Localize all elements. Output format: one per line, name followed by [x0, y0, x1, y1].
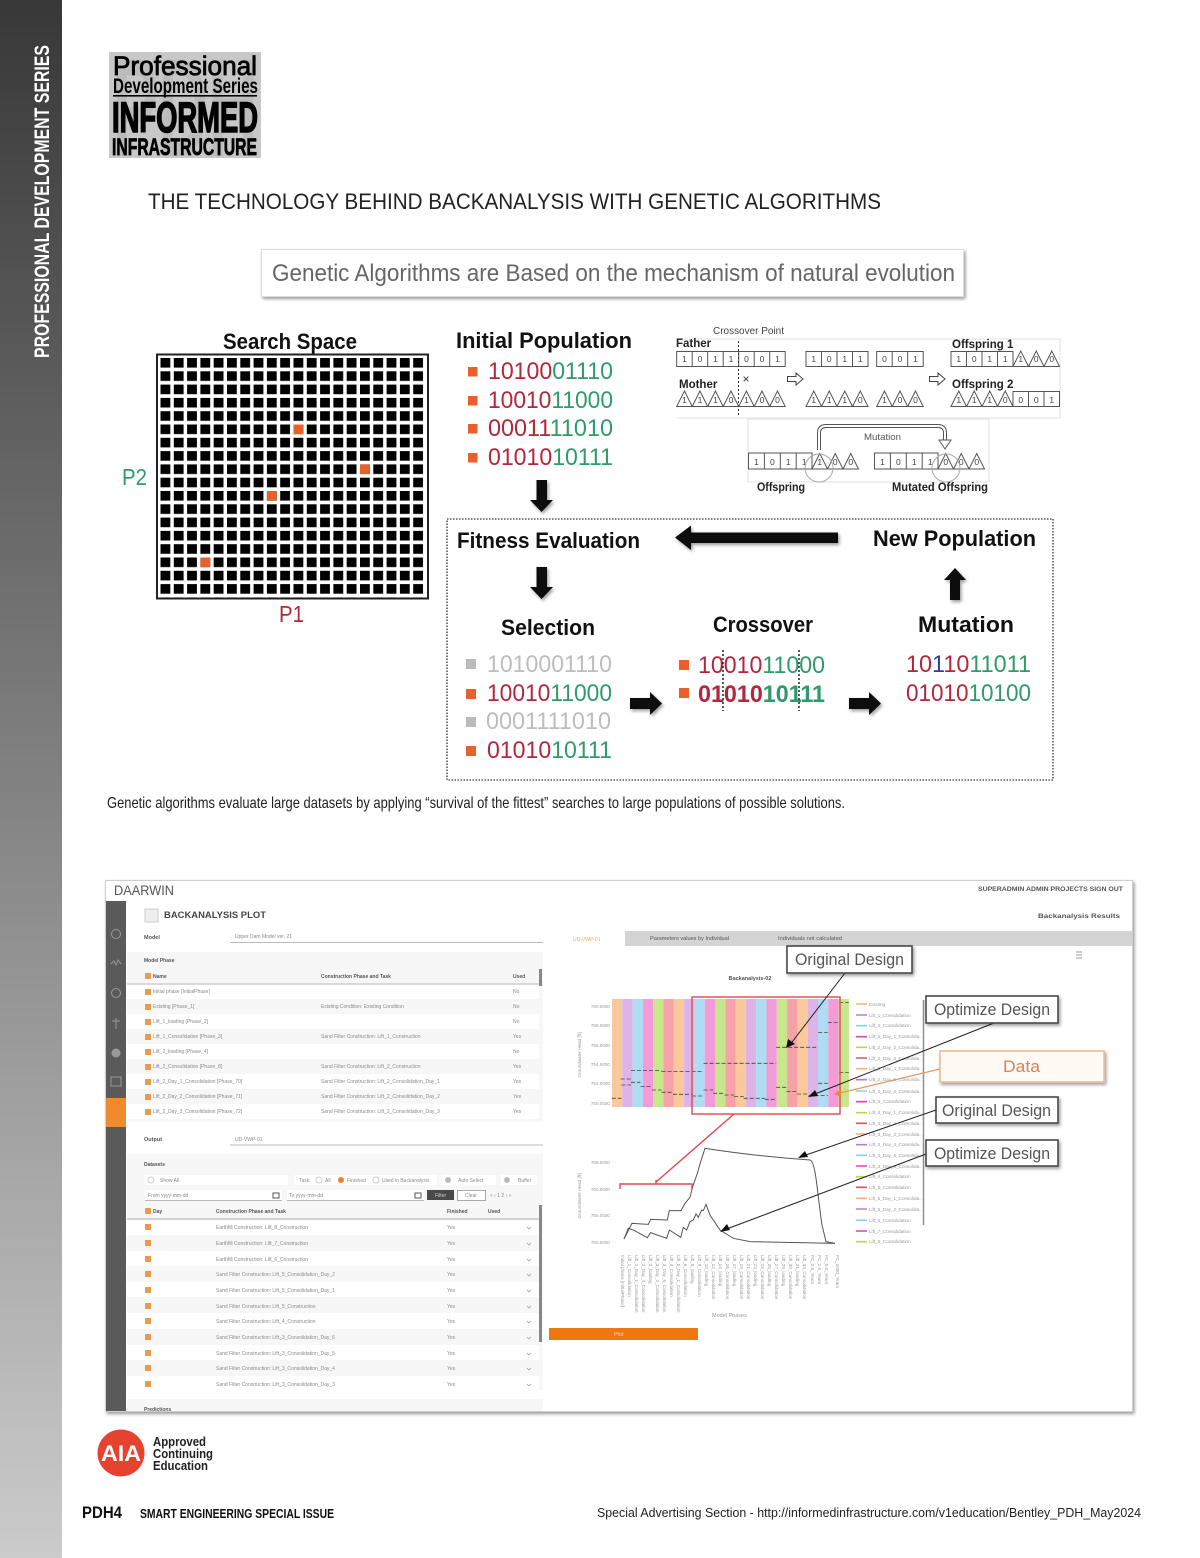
panel: crossover diagram: 0	[760, 395, 765, 405]
chart legend: Lift_4_Consolidation	[869, 1174, 911, 1179]
panel: mutation diagram: 0	[896, 457, 901, 467]
chart: phase labels: Lift_4_Consolidation	[669, 1255, 674, 1297]
chart: upper bands: 752.0000	[591, 1081, 610, 1086]
app header: SUPERADMIN ADMIN PROJECTS SIGN OUT	[978, 887, 1123, 893]
table: datasets: Yes	[447, 1288, 456, 1294]
badge: AIA approved continuing education: Approved	[153, 1435, 206, 1449]
results header and tabs: Individuals not calculated	[778, 936, 842, 942]
panel: crossover diagram: 0	[827, 354, 832, 364]
table: datasets: Yes	[447, 1257, 456, 1263]
table: model phase: Lift_2_Day_2_Consolidation [Phase_71]	[153, 1094, 243, 1100]
table: model phase: Name	[153, 974, 167, 980]
chart legend: Lift_3_Day_4_Consolida..	[869, 1142, 922, 1147]
panel: initial population: Initial Population	[456, 328, 632, 353]
logo: Professional Development Series, Informed Infrastructure	[109, 29, 261, 186]
chart legend: Lift_7_Consolidation	[869, 1229, 911, 1234]
chart: lower curves: 765.0000	[591, 1160, 610, 1165]
badge: AIA approved continuing education	[98, 1430, 213, 1476]
table: datasets: Yes	[447, 1304, 456, 1310]
panel: evolution loop	[447, 519, 1053, 780]
chart legend: Lift_1_Consolidation	[869, 1013, 911, 1018]
sidebar band	[0, 0, 62, 1558]
results header and tabs: Parameters values by Individual	[650, 936, 729, 942]
panel: search space	[122, 329, 428, 627]
badge: AIA approved continuing education: Education	[153, 1459, 208, 1473]
panel: crossover diagram: 1	[682, 395, 687, 405]
panel: crossover diagram: 1	[729, 354, 734, 364]
table: model phase	[127, 952, 543, 1122]
table: model phase: No	[513, 1019, 520, 1025]
chart: phase labels: Initial phase [InitialPhase]	[620, 1255, 625, 1307]
chart: phase labels: Lift_27_Consolidation	[774, 1255, 779, 1300]
chart: phase labels: Lift_2_Day_4_Consolidation	[641, 1255, 646, 1313]
chart: phase labels: Lift_31_loading	[795, 1255, 800, 1287]
panel: search space: Search Space	[223, 329, 357, 354]
callout: original design lower	[936, 1097, 1058, 1123]
chart legend	[856, 1000, 924, 1244]
callout: data: Data	[1003, 1057, 1041, 1076]
chart legend: Lift_2_Day_6_Consolida..	[869, 1089, 922, 1094]
table: model phase: No	[513, 1049, 520, 1055]
chart legend: Lift_3_Consolidation	[869, 1099, 911, 1104]
panel: mutation diagram: 1	[786, 457, 791, 467]
selection column: 0001111010	[486, 708, 611, 735]
panel: mutation diagram: 0	[959, 457, 964, 467]
table: datasets: Earthfill Construction: Lift_8_Construction	[216, 1225, 308, 1231]
table: model phase: Yes	[513, 1034, 522, 1040]
chart legend: Lift_2_Day_2_Consolida..	[869, 1045, 922, 1050]
screenshot: Daarwin backanalysis plot	[106, 880, 1132, 1413]
callout: original design top: Original Design	[795, 950, 904, 969]
plot button	[549, 1328, 698, 1340]
chart: phase labels: Lift_12_Consolidation	[711, 1255, 716, 1300]
table: datasets: Sand Filter Construction: Lift_5_Consolidation_Day_2	[216, 1272, 335, 1278]
panel: crossover diagram: 1	[713, 354, 718, 364]
chart legend: Lift_5_Day_2_Consolida..	[869, 1207, 922, 1212]
mutation column: 0101010100	[906, 680, 1031, 707]
output selector: Output	[144, 1137, 162, 1143]
panel: crossover diagram: 1	[858, 354, 863, 364]
chart: phase labels: Lift_3_Day_5_Consolidation	[662, 1255, 667, 1313]
chart: lower curves	[577, 1148, 835, 1245]
panel: crossover diagram: 1	[811, 354, 816, 364]
caption: Genetic algorithms evaluate large datasets by applying “survival of the fittest” searches to large populations of possible solutions.	[107, 795, 845, 812]
chart: phase labels: Model Phases	[712, 1313, 747, 1319]
panel: mutation diagram: Mutation	[864, 432, 901, 443]
panel: mutation diagram: 1	[817, 457, 822, 467]
table: datasets: Yes	[447, 1351, 456, 1357]
table: datasets: Finished	[347, 1178, 366, 1184]
panel: mutation diagram: 0	[848, 457, 853, 467]
chart: upper bands: 750.0000	[591, 1101, 610, 1106]
chart: phase labels: FC_1000_Years	[835, 1255, 840, 1289]
table: model phase: Model Phase	[144, 958, 175, 964]
banner: natural evolution	[262, 250, 964, 296]
chart legend: Lift_3_Day_2_Consolida..	[869, 1121, 922, 1126]
arrow: population to fitness	[530, 480, 553, 512]
panel: crossover diagram: 1	[827, 395, 832, 405]
panel: initial population: 0101010111	[488, 444, 613, 471]
panel: initial population: 1010001110	[488, 358, 613, 385]
panel: crossover diagram: Father	[676, 338, 712, 350]
table: model phase: Lift_2_Day_3_Consolidation [Phase_72]	[153, 1109, 243, 1115]
panel: crossover diagram: 1	[744, 395, 749, 405]
model selector	[144, 930, 543, 942]
panel: mutation diagram: 1	[880, 457, 885, 467]
panel: crossover diagram: 1	[882, 395, 887, 405]
table: datasets: Sand Filter Construction: Lift_3_Consolidation_Day_5	[216, 1351, 335, 1357]
chart legend: Lift_2_Day_5_Consolida..	[869, 1077, 922, 1082]
output selector	[144, 1133, 543, 1145]
results header and tabs: UD-VWP-01	[573, 937, 601, 943]
panel: initial population: 1001011000	[488, 387, 613, 414]
selection column: 1001011000	[487, 680, 612, 707]
chart: phase labels: Lift_16_Consolidation	[725, 1255, 730, 1300]
chart: phase labels: Lift_8_loading	[690, 1255, 695, 1284]
crossover column: 0101010111	[698, 681, 825, 708]
footer	[82, 1503, 1141, 1522]
table: model phase: Yes	[513, 1064, 522, 1070]
table: model phase: Sand Filter Construction: Lift_2_Consolidation_Day_3	[321, 1109, 440, 1115]
chart legend: Existing	[869, 1002, 886, 1007]
panel: crossover diagram: 0	[698, 354, 703, 364]
panel: crossover diagram: 1	[956, 395, 961, 405]
logo: Professional Development Series, Informed Infrastructure: INFRASTRUCTURE	[112, 134, 257, 161]
table: model phase: Sand Filter Construction: Lift_2_Consolidation_Day_1	[321, 1079, 440, 1085]
table: model phase: Sand Filter Construction: Lift_2_Consolidation_Day_2	[321, 1094, 440, 1100]
selection column: Selection	[501, 615, 595, 640]
table: model phase: Yes	[513, 1109, 522, 1115]
table: datasets: Sand Filter Construction: Lift_5_Consolidation_Day_1	[216, 1288, 335, 1294]
chart: upper bands	[577, 999, 849, 1107]
chart: phase labels: FC_0.5_Years	[810, 1255, 815, 1285]
table: model phase: Initial phase [InitialPhase]	[153, 989, 210, 995]
callout: optimize design top: Optimize Design	[934, 1000, 1050, 1019]
panel: mutation diagram: 1	[928, 457, 933, 467]
table: datasets: Finished	[447, 1209, 468, 1215]
results header and tabs	[573, 913, 1132, 982]
logo: Professional Development Series, Informed Infrastructure: Development Series	[113, 75, 258, 98]
badge: AIA approved continuing education: AIA	[101, 1441, 141, 1466]
logo: Professional Development Series, Informed Infrastructure: PDH	[112, 29, 258, 186]
chart legend: Lift_5_Day_1_Consolida..	[869, 1196, 922, 1201]
panel: mutation diagram: 1	[754, 457, 759, 467]
mutation column	[906, 612, 1031, 707]
chart: phase labels	[620, 1255, 840, 1319]
callout: optimize design top	[926, 996, 1058, 1023]
panel: initial population: 0001111010	[488, 415, 613, 442]
callout: red zoom bracket	[620, 997, 840, 1189]
selection column: 1010001110	[487, 651, 612, 678]
table: datasets: Sand Filter Construction: Lift_5_Construction	[216, 1304, 316, 1310]
panel: crossover diagram: 0	[882, 354, 887, 364]
table: datasets: Buffer	[518, 1178, 532, 1184]
logo: Professional Development Series, Informed Infrastructure: INFORMED	[112, 94, 258, 142]
panel: crossover diagram: 1	[956, 354, 961, 364]
chart legend: Lift_6_Consolidation	[869, 1218, 911, 1223]
heading: backanalysis plot	[145, 909, 267, 922]
table: datasets: Yes	[447, 1366, 456, 1372]
table: datasets: Yes	[447, 1225, 456, 1231]
badge: AIA approved continuing education: Continuing	[153, 1447, 213, 1461]
arrow: fitness to selection	[530, 567, 553, 599]
callout: optimize design lower	[926, 1140, 1058, 1166]
panel: crossover diagram: Offspring 2	[952, 379, 1013, 391]
table: datasets: Filter	[435, 1193, 446, 1199]
chart: upper bands: 756.0000	[591, 1043, 610, 1048]
chart: lower curves: Groundwater Head [ft]	[577, 1173, 582, 1219]
heading: backanalysis plot: BACKANALYSIS PLOT	[164, 910, 267, 920]
chart: phase labels: Lift_30_Consolidation	[788, 1255, 793, 1300]
arrow: crossover to mutation	[849, 692, 881, 715]
chart legend: Lift_2_Day_1_Consolida..	[869, 1034, 922, 1039]
chart: lower curves: 760.0000	[591, 1187, 610, 1192]
table: model phase: No	[513, 1004, 520, 1010]
panel: crossover diagram: 0	[1034, 395, 1039, 405]
chart: phase labels: Lift_26_loading	[767, 1255, 772, 1287]
table: datasets: Sand Filter Construction: Lift_3_Consolidation_Day_3	[216, 1382, 335, 1388]
heading: fitness evaluation: Fitness Evaluation	[457, 528, 640, 553]
heading: new population: New Population	[873, 526, 1036, 551]
table: model phase: Construction Phase and Task	[321, 974, 391, 980]
panel: crossover diagram: 0	[744, 354, 749, 364]
table: datasets: Predictions	[144, 1407, 171, 1413]
crossover column: Crossover	[713, 612, 813, 637]
table: model phase: Existing [Phase_1]	[153, 1004, 195, 1010]
chart: phase labels: Lift_3_Day_2_Consolidation	[655, 1255, 660, 1313]
footer: Special Advertising Section - http://informedinfrastructure.com/v1education/Bentley_PDH_May2024	[597, 1505, 1141, 1520]
panel: crossover diagram: 0	[858, 395, 863, 405]
table: datasets: « ‹ 1 2 › »	[490, 1193, 512, 1199]
panel: crossover diagram: 1	[842, 395, 847, 405]
chart: phase labels: Lift_33_Consolidation	[802, 1255, 807, 1300]
panel: crossover diagram: 0	[775, 395, 780, 405]
mutation column: 1011011011	[906, 651, 1031, 678]
table: datasets: Sand Filter Construction: Lift_3_Consolidation_Day_6	[216, 1335, 335, 1341]
chart: phase labels: Lift_1_Consolidation	[627, 1255, 632, 1297]
crossover column	[679, 612, 825, 711]
panel: crossover diagram: 1	[987, 354, 992, 364]
table: datasets: Sand Filter Construction: Lift_4_Construction	[216, 1319, 316, 1325]
chart: lower curves: 755.0000	[591, 1213, 610, 1218]
panel: mutation diagram: 0	[943, 457, 948, 467]
table: datasets: Used in Backanalysis	[382, 1178, 430, 1184]
chart: upper bands: 758.0000	[591, 1023, 610, 1028]
panel: crossover diagram: 0	[898, 354, 903, 364]
chart: phase labels: Lift_21_Consolidation	[746, 1255, 751, 1300]
panel: crossover diagram: 0	[729, 395, 734, 405]
chart: phase labels: Lift_10_loading	[704, 1255, 709, 1287]
chart: phase labels: FC_5.0_Years	[824, 1255, 829, 1285]
panel: crossover diagram: 0	[898, 395, 903, 405]
panel: crossover diagram: 0	[1034, 354, 1039, 364]
panel: crossover diagram: 1	[1003, 354, 1008, 364]
table: datasets: Datasets	[144, 1162, 165, 1168]
table: model phase: Used	[513, 974, 525, 980]
chart legend: Lift_3_Day_5_Consolida..	[869, 1153, 922, 1158]
callout: original design top	[787, 946, 912, 973]
panel: crossover diagram: 1	[1018, 354, 1023, 364]
results header and tabs: Backanalysis Results	[1038, 913, 1120, 920]
panel: crossover diagram: 0	[913, 395, 918, 405]
chart legend: Lift_2_Consolidation	[869, 1023, 911, 1028]
chart legend: Lift_3_Day_3_Consolida..	[869, 1132, 922, 1137]
chart: phase labels: Lift_19_Consolidation	[739, 1255, 744, 1300]
table: model phase: Existing Condition: Existing Condition	[321, 1004, 404, 1010]
panel: mutation diagram: 1	[802, 457, 807, 467]
panel: mutation diagram: 0	[770, 457, 775, 467]
chart legend: Lift_3_Day_6_Consolida..	[869, 1164, 922, 1169]
model selector: Model	[144, 935, 160, 941]
mutation column: Mutation	[918, 612, 1014, 637]
panel: crossover diagram: Crossover Point	[713, 326, 784, 337]
chart: phase labels: FC_2.5_Years	[817, 1255, 822, 1285]
app sidebar	[106, 901, 126, 1411]
table: datasets	[127, 1154, 543, 1413]
banner: natural evolution: Genetic Algorithms are Based on the mechanism of natural evolution	[272, 260, 955, 287]
selection column	[466, 615, 612, 764]
chart: upper bands: 754.0000	[591, 1062, 610, 1067]
table: datasets: Clear	[465, 1193, 477, 1199]
panel: crossover diagram: 1	[811, 395, 816, 405]
logo: Professional Development Series, Informed Infrastructure: Professional	[113, 51, 257, 81]
chart legend: Lift_5_Consolidation	[869, 1185, 911, 1190]
callout arrows	[720, 973, 994, 1232]
table: datasets: Sand Filter Construction: Lift_3_Consolidation_Day_4	[216, 1366, 335, 1372]
selection column: 0101010111	[487, 737, 612, 764]
panel: crossover diagram: Mother	[679, 379, 718, 391]
table: datasets: To yyyy-mm-dd	[289, 1193, 323, 1199]
table: datasets: Day	[153, 1209, 162, 1215]
panel: crossover diagram: 1	[913, 354, 918, 364]
panel: crossover diagram: Offspring 1	[952, 339, 1014, 351]
chart: phase labels: Lift_6_Consolidation	[683, 1255, 688, 1297]
model selector: Upper Dam Model ver. 21	[235, 934, 292, 940]
panel: initial population	[456, 328, 632, 471]
table: model phase: Lift_1_Consolidation [Phase_3]	[153, 1034, 223, 1040]
chart: upper bands: 760.0000	[591, 1004, 610, 1009]
results header and tabs: Backanalysis-02	[729, 976, 771, 982]
table: model phase: Lift_2_loading [Phase_4]	[153, 1049, 209, 1055]
table: model phase: Sand Filter Construction: Lift_1_Construction	[321, 1034, 421, 1040]
app header	[114, 883, 1123, 898]
panel: crossover diagram	[676, 326, 1060, 418]
chart legend: Lift_2_Day_3_Consolida..	[869, 1056, 922, 1061]
panel: search space: P2	[122, 464, 147, 490]
panel: mutation diagram: 0	[974, 457, 979, 467]
panel: mutation diagram: Offspring	[757, 482, 805, 494]
table: model phase: Yes	[513, 1079, 522, 1085]
panel: crossover diagram: 1	[1049, 395, 1054, 405]
panel: crossover diagram: 1	[713, 395, 718, 405]
table: datasets: Yes	[447, 1335, 456, 1341]
arrow: new population to fitness	[675, 526, 838, 550]
title: THE TECHNOLOGY BEHIND BACKANALYSIS WITH GENETIC ALGORITHMS	[148, 189, 881, 214]
callout: original design lower: Original Design	[942, 1101, 1051, 1120]
panel: crossover diagram: 1	[775, 354, 780, 364]
chart: phase labels: Lift_2_Day_1_Consolidation	[634, 1255, 639, 1313]
table: datasets: Show All	[160, 1178, 179, 1184]
callout: optimize design lower: Optimize Design	[934, 1144, 1050, 1163]
arrow: selection to crossover	[630, 692, 662, 715]
table: model phase: No	[513, 989, 520, 995]
panel: crossover diagram: 0	[972, 354, 977, 364]
chart: phase labels: Lift_24_Consolidation	[760, 1255, 765, 1300]
table: model phase: Yes	[513, 1094, 522, 1100]
chart: phase labels: Lift_29_loading	[781, 1255, 786, 1287]
panel: crossover diagram: 0	[1003, 395, 1008, 405]
table: datasets: Used	[488, 1209, 500, 1215]
table: datasets: Earthfill Construction: Lift_7_Construction	[216, 1241, 308, 1247]
table: datasets: Yes	[447, 1382, 456, 1388]
callout: data	[940, 1051, 1104, 1082]
chart: lower curves: 750.0000	[591, 1240, 610, 1245]
plot button: Plot	[614, 1332, 624, 1338]
panel: crossover diagram: 0	[1049, 354, 1054, 364]
panel: crossover diagram: 1	[682, 354, 687, 364]
panel: crossover diagram: 1	[987, 395, 992, 405]
footer: PDH4	[82, 1503, 122, 1522]
table: datasets: Yes	[447, 1272, 456, 1278]
panel: mutation diagram	[748, 419, 989, 494]
chart: phase labels: Lift_14_loading	[718, 1255, 723, 1287]
table: datasets: Auto Select	[458, 1178, 484, 1184]
table: datasets: Yes	[447, 1241, 456, 1247]
chart: phase labels: Lift_5_Day_1_Consolidation	[676, 1255, 681, 1313]
panel: crossover diagram: 1	[972, 395, 977, 405]
table: model phase: Lift_2_Consolidation [Phase_8]	[153, 1064, 223, 1070]
chart legend: Lift_8_Consolidation	[869, 1239, 911, 1244]
panel: mutation diagram: Mutated Offspring	[892, 482, 988, 494]
table: datasets: From yyyy-mm-dd	[148, 1193, 188, 1199]
table: datasets: Yes	[447, 1319, 456, 1325]
table: model phase: Sand Filter Construction: Lift_2_Construction	[321, 1064, 421, 1070]
chart: phase labels: Lift_23_loading	[753, 1255, 758, 1287]
chart: phase labels: Lift_3_loading	[648, 1255, 653, 1284]
chart: phase labels: Lift_17_loading	[732, 1255, 737, 1287]
app header: DAARWIN	[114, 883, 174, 898]
panel: crossover diagram: 0	[1018, 395, 1023, 405]
panel: search space: P1	[279, 601, 304, 627]
panel: crossover diagram: 1	[842, 354, 847, 364]
footer: SMART ENGINEERING SPECIAL ISSUE	[140, 1506, 334, 1521]
table: datasets: Earthfill Construction: Lift_6_Construction	[216, 1257, 308, 1263]
chart: upper bands: Groundwater Head [ft]	[577, 1032, 582, 1078]
table: model phase: Lift_1_loading [Phase_2]	[153, 1019, 209, 1025]
output selector: UD-VWP-01	[235, 1137, 263, 1143]
table: datasets: All	[325, 1178, 331, 1184]
table: datasets: Task:	[299, 1178, 311, 1184]
chart legend: Lift_3_Day_1_Consolida..	[869, 1110, 922, 1115]
panel: crossover diagram: ×	[742, 372, 750, 386]
table: datasets: Construction Phase and Task	[216, 1209, 286, 1215]
table: model phase: Lift_2_Day_1_Consolidation [Phase_70]	[153, 1079, 243, 1085]
crossover column: 1001011000	[698, 652, 825, 679]
arrow: mutation to new population	[944, 568, 966, 600]
chart legend: Lift_2_Day_4_Consolida..	[869, 1066, 922, 1071]
panel: mutation diagram: 0	[833, 457, 838, 467]
panel: mutation diagram: 1	[912, 457, 917, 467]
panel: crossover diagram: 0	[760, 354, 765, 364]
panel: crossover diagram: 1	[698, 395, 703, 405]
chart: phase labels: Lift_9_Consolidation	[697, 1255, 702, 1297]
